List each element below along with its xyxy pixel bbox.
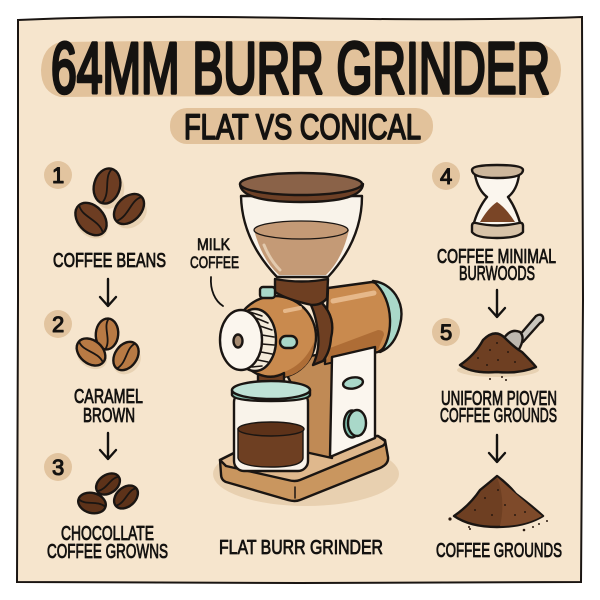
subtitle: FLAT VS CONICAL	[184, 108, 421, 147]
arrow 1 to 2	[100, 279, 116, 306]
mint indicator	[342, 376, 364, 390]
collection jar	[232, 381, 310, 471]
icon: chocolate beans	[76, 469, 142, 516]
front drum	[234, 296, 316, 378]
arrow 2 to 3	[100, 433, 116, 459]
icon: coffee grounds pile	[448, 476, 548, 531]
icon: hourglass	[472, 165, 523, 238]
adjustment dial	[220, 309, 276, 371]
coffee in hopper	[254, 230, 349, 275]
step 1: coffee beans	[44, 161, 166, 272]
mint end cap	[373, 281, 401, 352]
mint side knob	[280, 336, 297, 348]
icon: scoop in grounds	[457, 315, 543, 381]
step 2: caramel brown	[44, 310, 146, 408]
step 5: uniform grounds	[432, 315, 557, 410]
hopper glass	[241, 196, 362, 277]
label: brown: BROWN	[83, 405, 135, 427]
badge 5: 5	[440, 320, 452, 345]
badge 4: 4	[440, 164, 452, 189]
label: flat burr grinder: FLAT BURR GRINDER	[219, 537, 383, 559]
stand column	[285, 352, 335, 458]
callout: milk coffee: COFFEE	[190, 254, 239, 272]
spout	[258, 373, 284, 388]
label: burwoods: BURWOODS	[459, 263, 535, 285]
control knob	[344, 410, 366, 438]
step 3: chocolate	[44, 453, 154, 545]
label: coffee growns: COFFEE GROWNS	[47, 541, 168, 563]
illustration: burr grinder	[213, 173, 401, 506]
step 4: minimal burwoods	[432, 162, 556, 268]
neck	[275, 279, 328, 305]
label: caramel brown: CARAMEL	[74, 386, 143, 408]
rear cylinder	[325, 281, 401, 364]
arrow 5 to pile	[489, 435, 505, 462]
arrow 4 to 5	[489, 290, 505, 317]
collar	[310, 303, 332, 365]
mint top tab	[260, 287, 275, 298]
hopper lid	[240, 173, 363, 202]
white control panel	[330, 347, 375, 457]
label: chocollate: CHOCOLLATE	[61, 523, 154, 545]
badge 3: 3	[52, 455, 64, 480]
label: coffee beans: COFFEE BEANS	[53, 250, 166, 272]
icon: dark coffee beans	[69, 165, 152, 244]
base	[220, 436, 388, 501]
ground coffee in jar	[238, 429, 303, 467]
callout: milk coffee: MILK	[197, 236, 230, 254]
callout: milk coffee	[190, 236, 239, 306]
jar lid	[232, 390, 310, 401]
badge 2: 2	[52, 312, 64, 337]
base shadow	[213, 442, 399, 506]
badge 1: 1	[52, 163, 64, 188]
icon: caramel beans	[71, 318, 146, 380]
